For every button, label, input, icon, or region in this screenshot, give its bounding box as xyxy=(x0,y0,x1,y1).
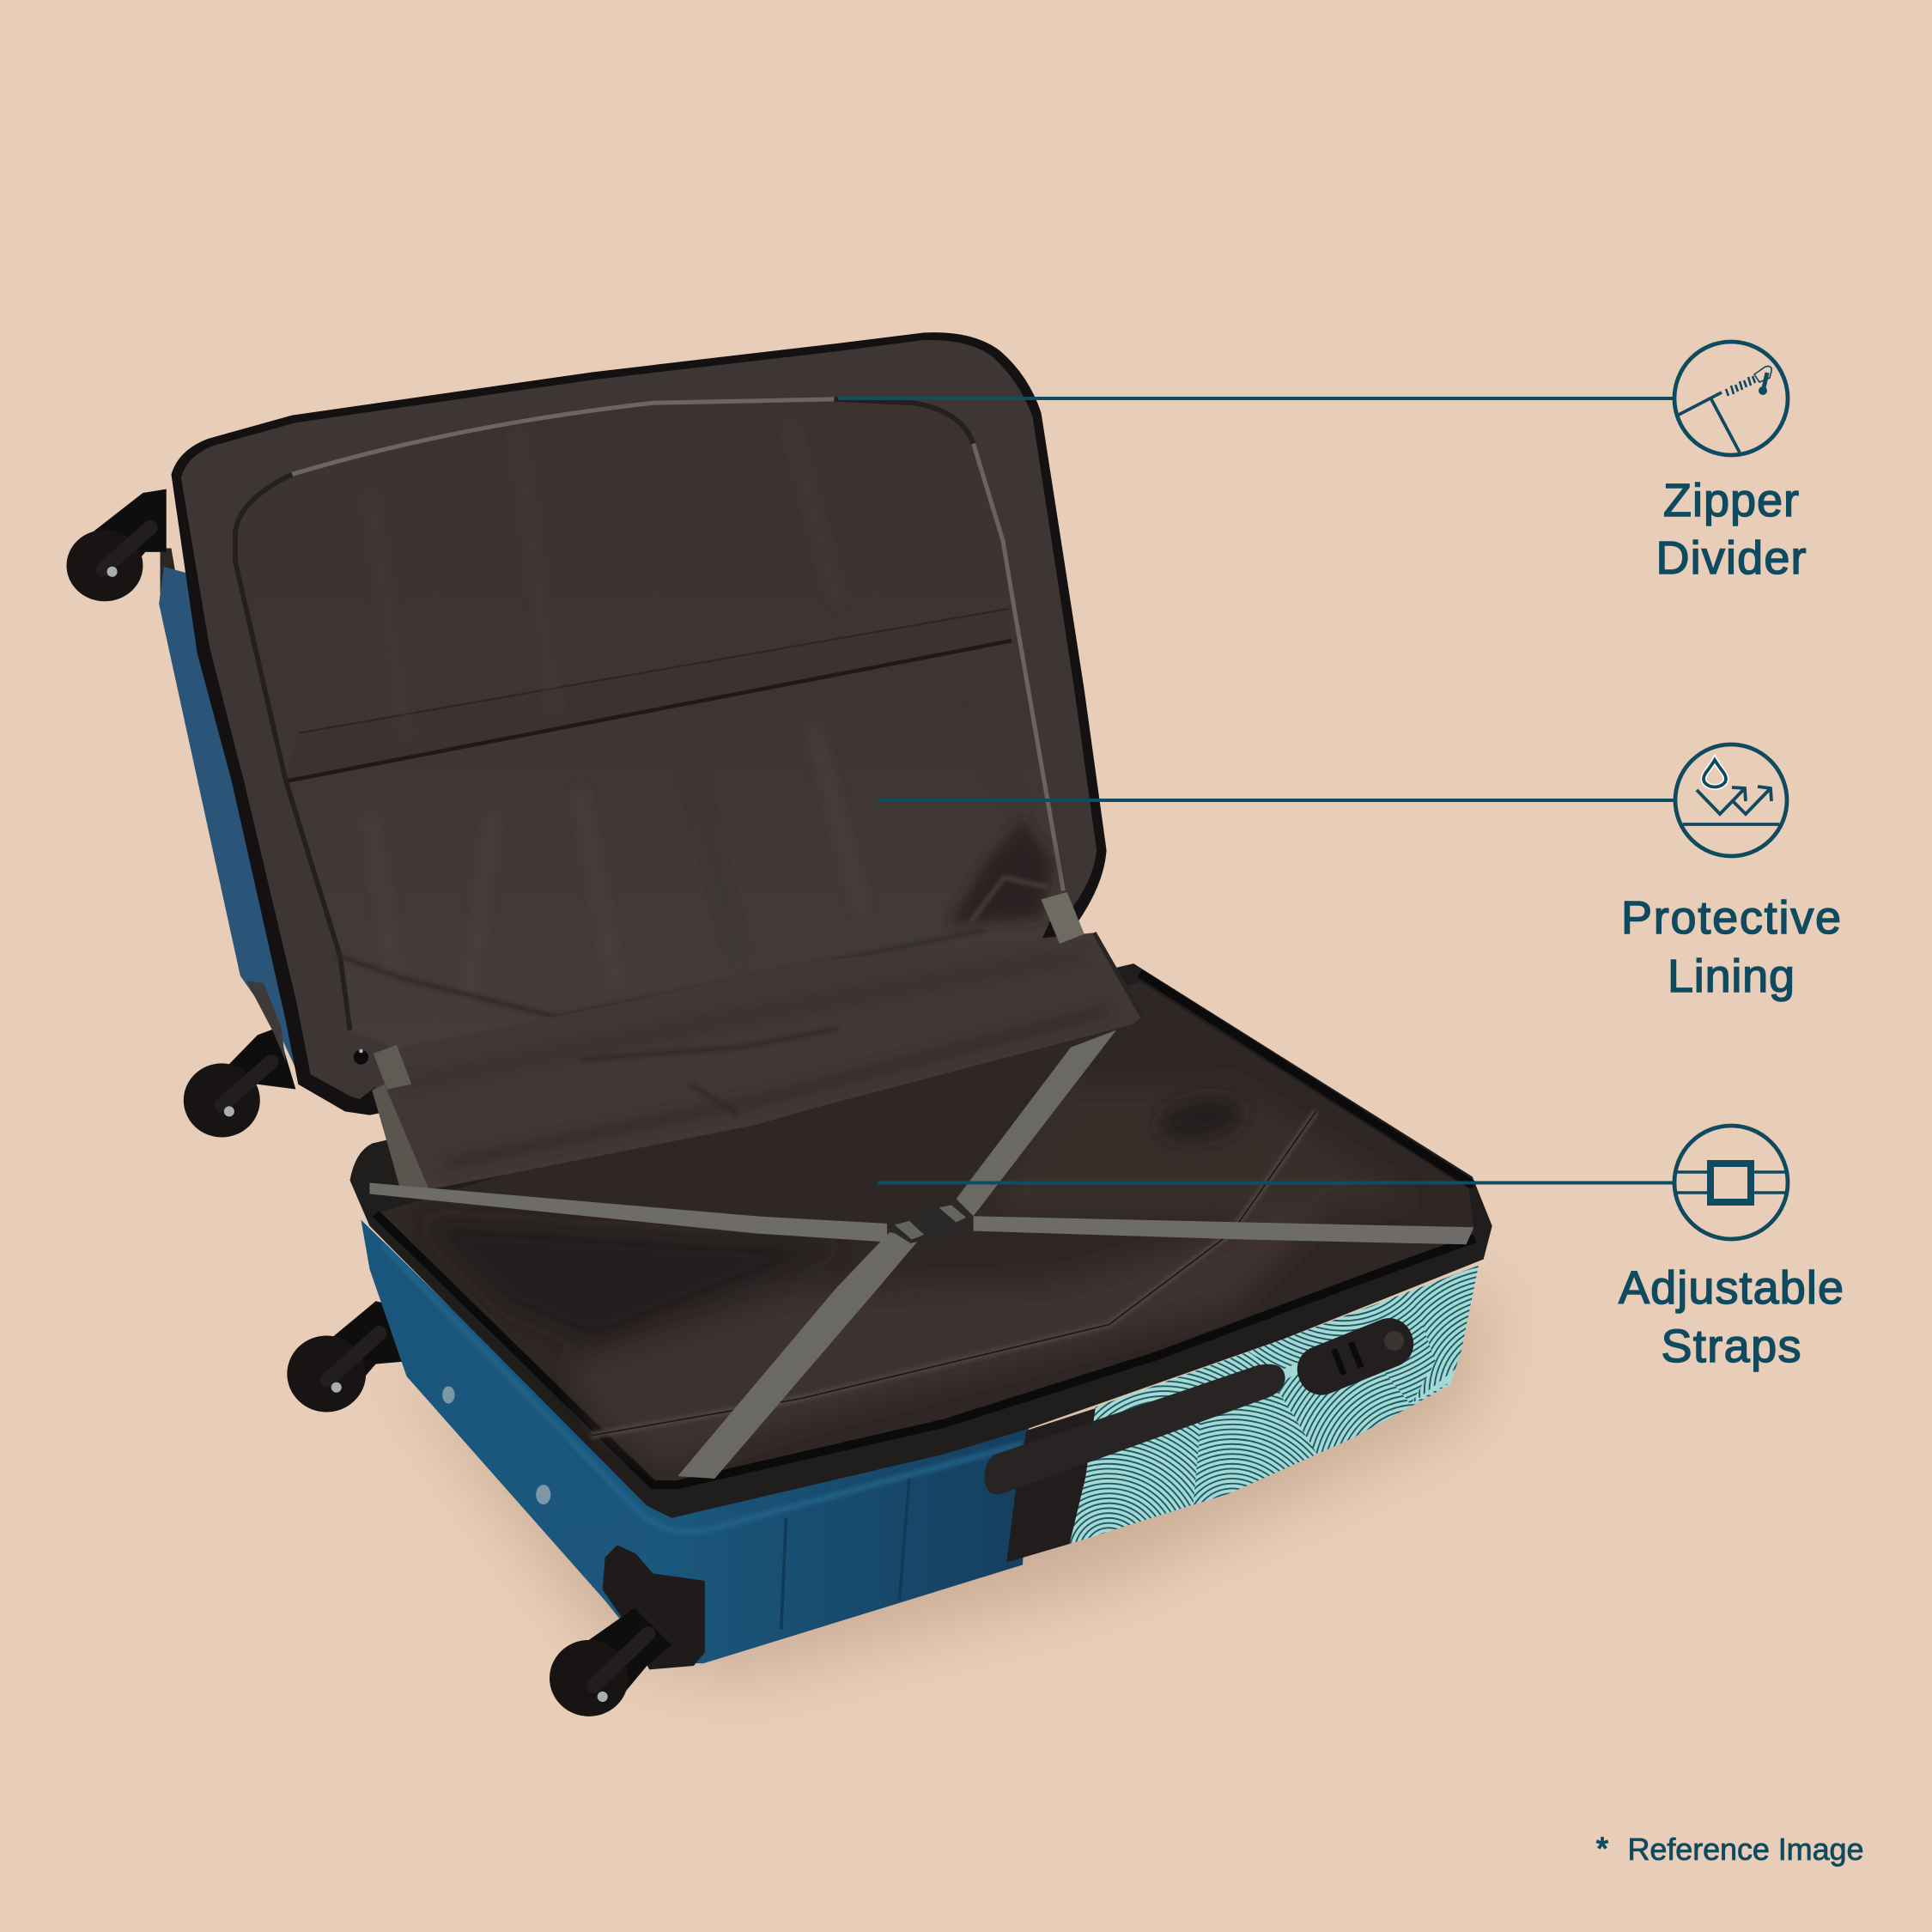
lower case interior xyxy=(350,963,1492,1518)
shell side xyxy=(361,1220,714,1663)
lighter lining patches xyxy=(419,1084,1417,1467)
strap left xyxy=(369,1183,887,1242)
lid fabric border xyxy=(181,340,1097,1099)
icon: water repellent xyxy=(1675,744,1787,856)
icon: strap buckle xyxy=(1674,1126,1788,1239)
zipper edge xyxy=(376,974,1475,1485)
leader line xyxy=(878,799,1674,802)
gathers near hinge xyxy=(971,878,1048,921)
lining xyxy=(376,982,1475,1485)
icon: zipper xyxy=(1674,342,1788,455)
text: Divider xyxy=(1656,532,1807,584)
callout: protective lining xyxy=(878,744,1841,944)
lining folds xyxy=(369,419,1023,998)
strap diagonal upper xyxy=(957,1030,1116,1216)
callout: zipper divider xyxy=(838,342,1799,526)
suitcase illustration xyxy=(67,332,1504,1716)
floor shadow xyxy=(382,1281,1497,1678)
handle xyxy=(985,1364,1285,1563)
strap right xyxy=(974,1216,1473,1244)
label: Protective xyxy=(1621,892,1841,944)
rim xyxy=(350,963,1492,1518)
label: Adjustable xyxy=(1619,1262,1844,1314)
footnote: Reference Image xyxy=(1628,1832,1863,1867)
callout: adjustable straps xyxy=(878,1126,1844,1314)
wheel: top left xyxy=(66,489,179,601)
lid lining xyxy=(235,399,1063,1054)
strap diagonal lower xyxy=(677,1232,919,1479)
lining seam xyxy=(592,1111,1316,1436)
wheel: front xyxy=(550,1545,705,1716)
combination lock xyxy=(1291,1311,1420,1402)
text: Straps xyxy=(1661,1321,1801,1372)
rivets xyxy=(442,1386,454,1403)
text: Lining xyxy=(1668,951,1795,1002)
lower case blue shell xyxy=(361,1220,1029,1663)
lid xyxy=(171,332,1107,1115)
label: Zipper xyxy=(1663,475,1799,526)
fabric roll divider xyxy=(354,892,1142,1193)
roll end tabs xyxy=(372,1084,428,1193)
lid blue shell edge xyxy=(159,567,357,1084)
zipper divider trim xyxy=(292,399,834,474)
teal patterned shell panel xyxy=(1070,1266,1479,1544)
leader line xyxy=(838,397,1674,400)
lid outer edge xyxy=(171,332,1107,1115)
ridge lines xyxy=(781,1479,909,1629)
leader line xyxy=(878,1182,1674,1185)
pocket band xyxy=(286,609,1012,781)
wheel: lower left xyxy=(287,1301,404,1412)
dark fold xyxy=(1157,1092,1246,1145)
buckle xyxy=(887,1200,974,1243)
footnote: * xyxy=(1596,1831,1608,1866)
compression straps xyxy=(369,1030,1473,1479)
wheel: middle left xyxy=(184,1028,295,1137)
shell front xyxy=(616,1425,1029,1663)
shell lip highlight xyxy=(382,1244,1023,1532)
